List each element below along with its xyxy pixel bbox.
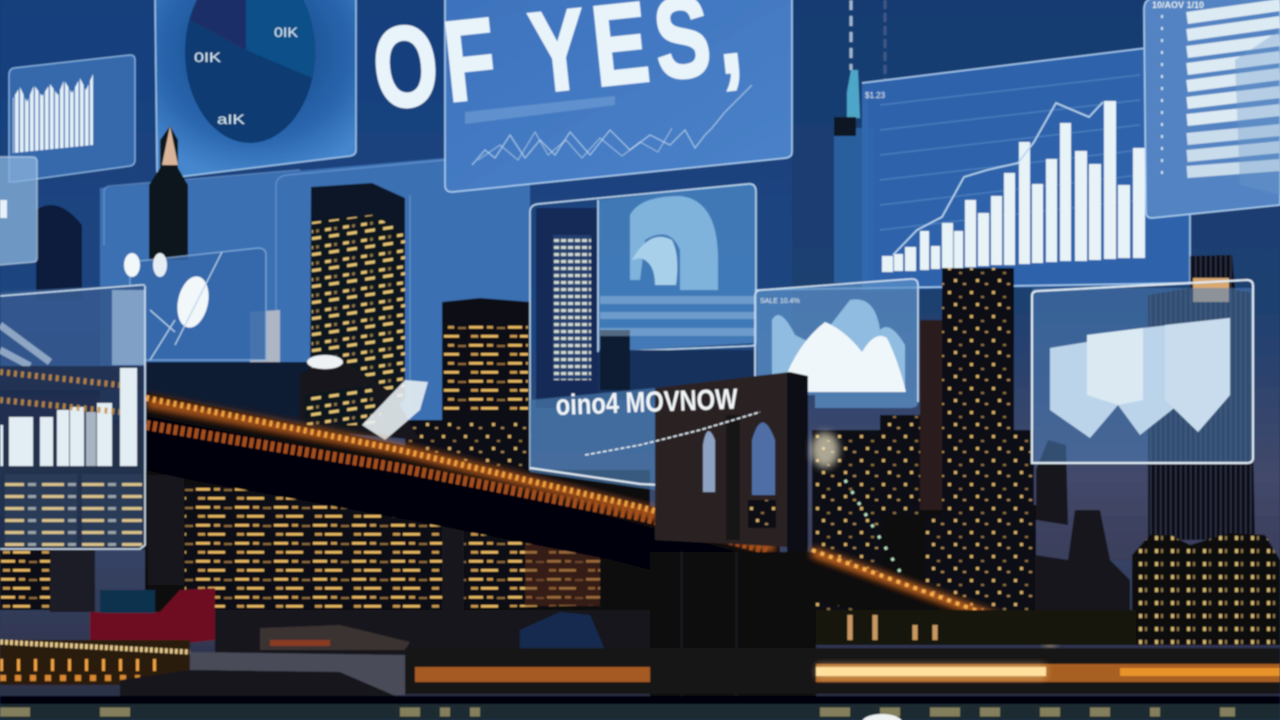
panel: main title card [445,0,792,192]
panel: left lower backdrop [0,284,145,390]
building: dark band above bridge [146,362,311,432]
left bars [0,368,137,466]
building: short right tower [1036,440,1068,525]
panel: icons [124,248,266,360]
header label: 10/AOV 1/10 [1152,0,1204,10]
reflections [0,708,1235,716]
building: left spire [149,126,188,260]
dark block [925,515,1035,635]
building: riverfront low [215,610,650,655]
chart tiny label: $1.23 [865,91,886,100]
lower glass stripes [600,296,755,336]
blue roof mid [520,612,605,650]
bridge upper lights [146,398,770,542]
shape group [1050,318,1230,438]
tower lit windows [748,500,776,528]
bridge lower lights [146,425,770,550]
panel: top right stripes [1144,0,1280,218]
diagonal lit cable [0,325,50,366]
left block dark [50,550,95,612]
building: central tall tower [310,183,405,425]
front mountains [780,322,906,392]
gridlines [880,75,1140,230]
teal spire [847,70,860,118]
flare top [307,355,343,369]
glow: tower flare [811,432,839,468]
right span glow [812,552,1040,634]
pier shading [735,552,738,712]
left panel lit windows [5,474,77,546]
panel: lower right shapes [1032,280,1253,463]
building: tower lower left grey [250,310,280,375]
pie label bottom: aIK [217,111,246,127]
antenna tower dashes [851,0,885,80]
water [0,696,1280,720]
bright strip mid [816,664,1280,682]
shape right [1165,318,1230,432]
stripes lower [1187,130,1280,172]
arch left [703,431,715,492]
building: central block [442,298,530,425]
building: dark fill right of flare [405,420,531,485]
strip right amber [1120,668,1280,676]
red-brown wing [525,538,600,606]
building: mass behind bridge [0,470,650,620]
pie slice [246,0,315,78]
block windows [444,325,528,415]
bridge: main deck left [146,392,780,600]
lit crown [1193,278,1229,302]
lights row lower [0,659,160,671]
spire tip [162,126,178,165]
red accents [270,640,330,646]
shore lit pillars [850,615,935,640]
icon: dot right [153,253,167,277]
panel: small bars [9,55,135,182]
building: right skyscraper [1148,255,1255,540]
lit windows column [553,235,591,380]
donut [630,196,718,290]
trend line [893,102,1103,255]
bridge tower right column [787,372,808,560]
icon: dot left [124,253,140,277]
far left block [0,550,50,610]
neighbor tower [880,415,920,515]
building: dark arched tower [36,205,82,300]
low tower windows [305,385,385,425]
line chart noise [478,128,672,160]
right span lights [812,550,1040,634]
lower dark through-glass area [598,350,758,400]
tower through glass [600,330,630,390]
right shoreline buildings [816,610,1136,645]
arch right [752,422,775,495]
garbled banner text: oino4 MOVNOW [555,384,739,422]
highlight glow [816,664,1046,679]
panel: faint glass outlines [104,160,445,420]
back mountains [772,299,905,392]
block: red warehouse [90,588,215,648]
pie label right: 0IK [274,24,299,40]
panel: left bars [0,286,145,550]
cables glow top left [0,372,120,412]
side tower [1014,430,1034,520]
donut inner [632,237,677,285]
shaded stripe area [1235,30,1280,195]
shape lighter [1087,328,1143,405]
small white glyph [0,200,7,218]
axis ticks [1161,15,1163,178]
pier shading [680,552,683,712]
building: skyline fill near right [812,430,1130,645]
building: dark tower under mountain panel [812,268,1036,620]
shoreline lights left [0,640,190,685]
dark column left [148,475,184,585]
highlight bar in title card [465,96,615,124]
small bar chart [13,74,93,153]
tower cap [834,117,856,136]
tan roof [260,625,410,650]
panel: center glass [530,184,758,470]
hot spot [1043,631,1057,645]
pie slice dark [190,0,246,50]
panel: faint mid-left glass backdrop [100,158,530,420]
building: mid low tower [300,355,420,440]
tower windows [862,90,868,280]
glow: building flare [307,355,428,440]
white dome at bottom [862,714,902,720]
panel: right bar chart [754,43,1190,290]
dark hull [120,670,400,700]
pie label left: 0IK [194,49,222,65]
tower cluster behind bridge [812,430,882,610]
icon: leaf [173,273,213,331]
panel: top left small [0,157,37,265]
bridge glow [146,402,775,548]
bridge tower [655,372,808,560]
panel caption: SALE 10.4% [760,298,800,305]
tower dark mullion [726,415,740,540]
left panel lit windows 2 [82,474,142,546]
tower windows left face [312,215,372,425]
center panel lower region [530,388,776,491]
bridge: right span [812,548,1057,645]
pale block [112,290,145,365]
inner panel edge [597,200,599,352]
tower windows right face [372,215,405,418]
line chart in title card [472,85,752,165]
building: block cluster right [1132,533,1280,645]
panel: pie chart [155,0,356,178]
icon lines [150,252,222,360]
panel: mountain chart [755,279,918,408]
ferry terminal strip [405,648,1280,694]
bright highlight [816,667,1046,676]
building: tower through center panel [536,208,598,408]
bars [882,101,1145,272]
neighbor strip [920,320,942,510]
green cable lights [845,480,905,580]
bridge: pier [650,552,816,714]
stripes [1187,5,1280,120]
lights row [0,642,190,652]
dark column [442,520,464,615]
blue roof [100,590,155,613]
pie disc [185,0,315,143]
grey pier [120,652,405,700]
panel bottom edge [530,468,776,491]
lights row bottom [0,675,140,681]
tower behind chart [834,70,874,283]
suspension cable [585,412,760,455]
building windows large [185,485,600,615]
